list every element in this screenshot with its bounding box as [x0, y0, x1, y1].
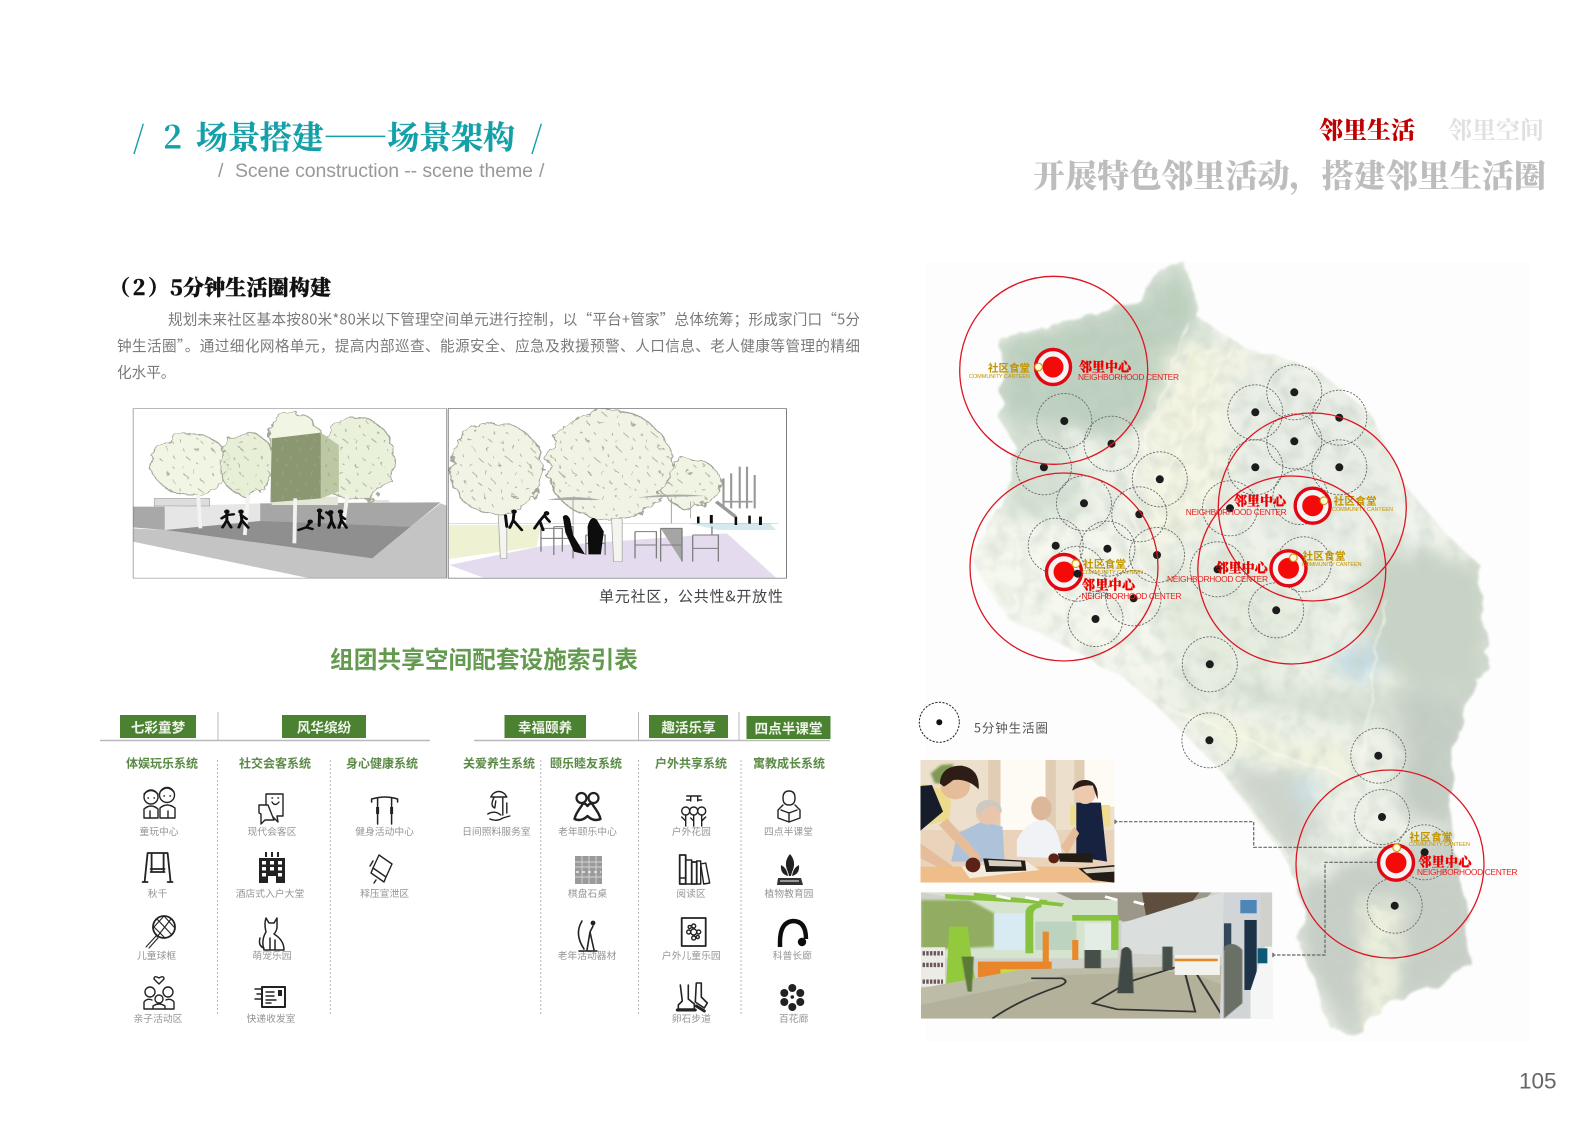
item labels: 快递收发室 — [247, 1011, 296, 1025]
site map — [960, 255, 1500, 1045]
system headers: 颐乐睦友系统 — [550, 754, 622, 772]
icon: reader — [778, 791, 800, 822]
neighborhood center E: 社区食堂 — [1409, 830, 1452, 844]
neighborhood center A: 邻里中心 — [1079, 356, 1134, 376]
icon: swing — [143, 853, 173, 882]
item labels: 植物教育园 — [765, 886, 813, 900]
neighborhood center D: 社区食堂 — [1302, 548, 1346, 564]
icon: books — [680, 855, 710, 884]
neighborhood center A: NEIGHBORHOOD CENTER — [1078, 372, 1179, 382]
item labels: 百花廊 — [779, 1011, 809, 1025]
neighborhood center D — [1167, 476, 1386, 664]
figures — [222, 510, 347, 530]
subtitle: Scene construction -- scene theme — [235, 160, 533, 182]
paragraph — [117, 308, 860, 382]
item labels: 科普长廊 — [773, 948, 812, 962]
neighborhood center E: 邻里中心 — [1418, 852, 1474, 870]
icon: day care — [488, 792, 510, 820]
figures — [506, 511, 550, 530]
item labels: 四点半课堂 — [764, 824, 813, 838]
icon: children — [144, 788, 175, 818]
item labels: 老年颐乐中心 — [558, 824, 617, 838]
legend: 5分钟生活圈 — [974, 718, 1048, 736]
item labels: 日间照料服务室 — [462, 824, 531, 838]
panel: section illustration left — [133, 408, 447, 578]
icon: gym — [372, 797, 398, 824]
item labels: 户外花园 — [672, 824, 711, 838]
item labels: 秋千 — [148, 886, 168, 900]
icon: chat — [259, 794, 283, 824]
item labels: 阅读区 — [676, 886, 706, 900]
neighborhood center B: COMMUNITY CANTEEN — [1082, 570, 1143, 576]
item labels: 健身活动中心 — [355, 824, 414, 838]
item labels — [134, 824, 813, 1025]
neighborhood center A — [960, 276, 1179, 464]
neighborhood center A: COMMUNITY CANTEEN — [969, 374, 1030, 380]
category tabs: 风华缤纷 — [297, 716, 352, 736]
neighborhood center C: 邻里中心 — [1234, 490, 1289, 510]
neighborhood center B: NEIGHBORHOOD CENTER — [1082, 591, 1182, 601]
category tabs: 幸福颐养 — [518, 716, 573, 736]
item labels: 户外儿童乐园 — [662, 948, 721, 962]
category tabs: 七彩童梦 — [131, 716, 186, 736]
system headers: 户外共享系统 — [655, 754, 727, 772]
neighborhood center E: COMMUNITY CANTEEN — [1409, 842, 1470, 848]
section heading: 5分钟生活圈构建 — [170, 272, 331, 302]
item labels: 老年活动器材 — [558, 948, 617, 962]
icon: cat — [260, 918, 284, 950]
item labels: 棋盘石桌 — [568, 886, 607, 900]
system headers: 社交会客系统 — [239, 754, 311, 772]
rules — [100, 712, 830, 1015]
icon: arc gallery — [780, 921, 806, 947]
legend — [919, 702, 1048, 742]
icon: stress relief — [370, 855, 392, 883]
table title: 组团共享空间配套设施索引表 — [330, 641, 638, 675]
neighborhood center C: 社区食堂 — [1334, 494, 1377, 508]
tab: active: 邻里生活 — [1319, 110, 1415, 146]
neighborhood center A: 社区食堂 — [988, 360, 1030, 376]
neighborhood center B — [970, 473, 1182, 661]
item labels: 萌宠乐园 — [252, 948, 292, 962]
system headers: 关爱养生系统 — [463, 754, 535, 772]
icon: racket — [146, 916, 175, 948]
subtitle: / — [539, 160, 545, 182]
item labels: 现代会客区 — [248, 824, 297, 838]
five-minute circles — [1016, 365, 1452, 933]
panel: section illustration right — [448, 408, 787, 578]
item labels: 亲子活动区 — [134, 1011, 183, 1025]
photo: canteen — [920, 760, 1114, 883]
map background — [925, 262, 1530, 1042]
icon: parcel — [255, 987, 285, 1007]
neighborhood center C — [1186, 413, 1406, 601]
icon: plant — [777, 854, 803, 885]
slogan: 开展特色邻里活动，搭建邻里生活圈 — [1033, 151, 1546, 197]
item labels: 卵石步道 — [672, 1011, 711, 1025]
caption: 单元社区，公共性&开放性 — [599, 586, 783, 606]
title: / — [531, 112, 542, 158]
icon: hotel — [259, 852, 285, 883]
system headers: 寓教成长系统 — [753, 754, 825, 772]
system headers — [126, 754, 825, 772]
item labels: 儿童球框 — [137, 948, 176, 962]
neighborhood center E — [1296, 770, 1518, 958]
paragraph: 规划未来社区基本按80米*80米以下管理空间单元进行控制，以“平台+管家”总体统筹；形成家门口“5分 — [168, 308, 860, 330]
paragraph: 化水平。 — [117, 362, 175, 382]
page number: 105 — [1519, 1068, 1557, 1094]
leader lines — [1112, 820, 1396, 957]
subtitle: / — [218, 160, 224, 182]
icon: pebble path — [677, 983, 707, 1011]
furniture — [541, 527, 718, 562]
neighborhood center C: NEIGHBORHOOD CENTER — [1186, 507, 1287, 517]
icon: playground — [682, 918, 706, 946]
neighborhood center D: NEIGHBORHOOD CENTER — [1167, 574, 1268, 584]
system headers: 体娱玩乐系统 — [126, 754, 198, 772]
icon: glasses and moustache — [574, 793, 600, 820]
system headers: 身心健康系统 — [346, 754, 418, 772]
neighborhood center C: COMMUNITY CANTEEN — [1332, 507, 1393, 513]
icon: flower — [780, 984, 804, 1011]
icon: elderly equipment — [578, 921, 597, 951]
category tabs: 四点半课堂 — [755, 718, 822, 738]
title: / — [133, 112, 144, 158]
neighborhood center B: 社区食堂 — [1083, 556, 1126, 572]
neighborhood center E: NEIGHBORHOOD CENTER — [1417, 867, 1518, 877]
category tabs — [120, 715, 830, 739]
facility index table — [100, 712, 830, 1025]
neighborhood center D: COMMUNITY CANTEEN — [1302, 562, 1362, 568]
icon: family — [144, 977, 174, 1009]
item labels: 酒店式入户大堂 — [236, 886, 304, 900]
title: 场景搭建——场景架构 — [196, 112, 515, 158]
icon: flowers — [682, 796, 706, 826]
paragraph: 钟生活圈”。通过细化网格单元，提高内部巡查、能源安全、应急及救援预警、人口信息、老人健康等管理的精细 — [117, 335, 860, 356]
tab: inactive: 邻里空间 — [1448, 110, 1544, 146]
neighborhood center D: 邻里中心 — [1216, 558, 1271, 576]
photo: community hall — [921, 892, 1272, 1019]
item labels: 童玩中心 — [139, 824, 179, 838]
icon: chess table — [575, 856, 602, 884]
item labels: 释压宣泄区 — [360, 886, 409, 900]
category tabs: 趣活乐享 — [661, 716, 716, 736]
neighborhood center B: 邻里中心 — [1082, 574, 1138, 594]
section heading: （2） — [109, 272, 169, 302]
title: 2 — [163, 112, 182, 158]
